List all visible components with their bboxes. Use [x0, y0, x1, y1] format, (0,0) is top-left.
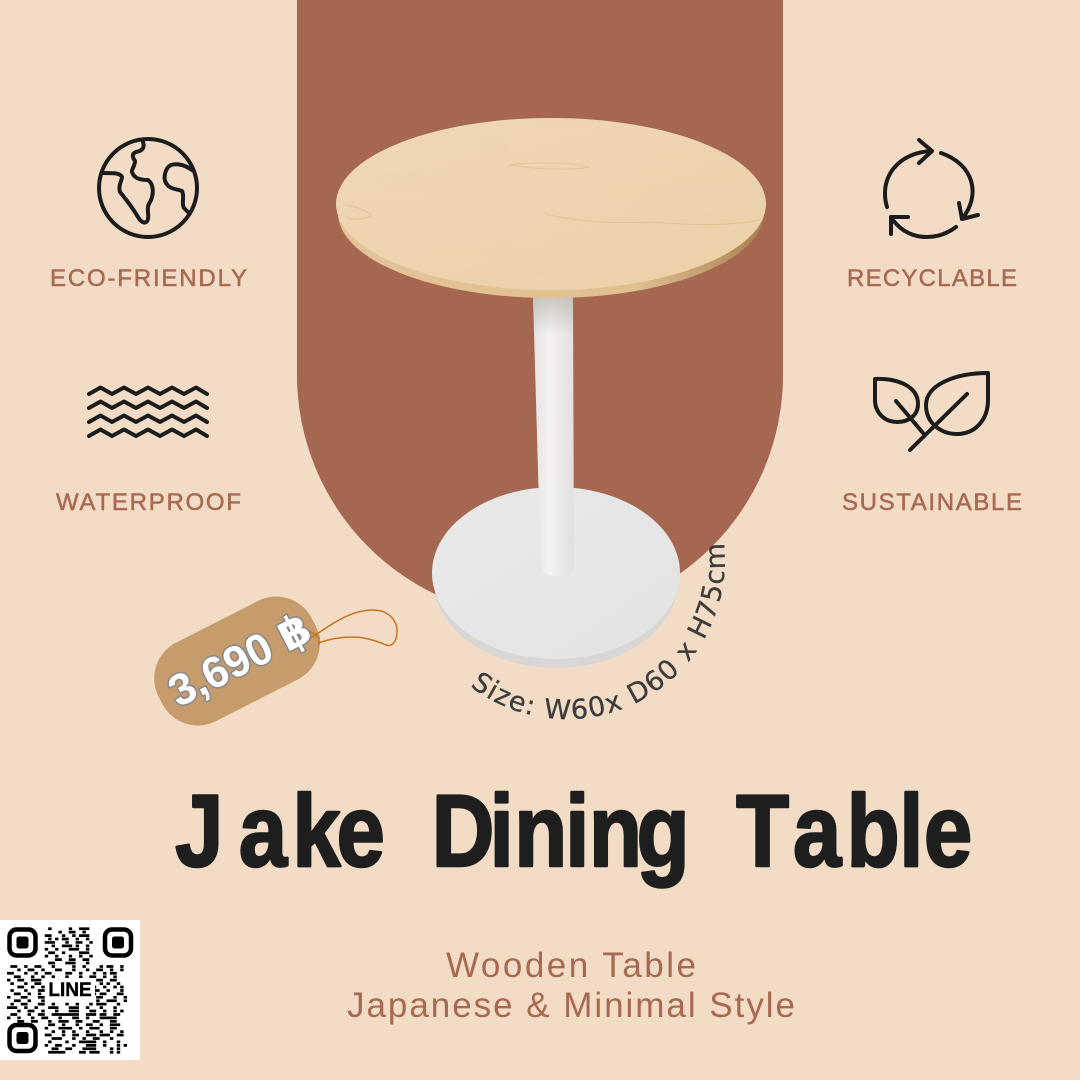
- subtitle: Japanese & Minimal Style: [347, 986, 795, 1025]
- curved size text: Size: W60x D60 x H75cm: [472, 545, 726, 720]
- title: [175, 774, 972, 889]
- subtitle: Wooden Table: [446, 946, 696, 985]
- title: Jake: [175, 774, 385, 889]
- title: Table: [736, 774, 972, 889]
- arch panel: [297, 0, 783, 618]
- label: sustainable: SUSTAINABLE: [842, 489, 1022, 516]
- icon: waves: [89, 388, 207, 436]
- table top: [336, 118, 766, 298]
- icon: globe: [99, 139, 197, 237]
- QR code: [0, 920, 140, 1060]
- QR finder patterns: [10, 930, 131, 1051]
- QR LINE logo: LINE: [48, 980, 92, 1001]
- icon: leaves: [875, 373, 988, 450]
- product: table: [336, 118, 766, 668]
- QR data modules: [7, 929, 127, 1052]
- label: eco-friendly: ECO-FRIENDLY: [50, 265, 247, 292]
- label: recyclable: RECYCLABLE: [847, 265, 1017, 292]
- title: Dining: [432, 774, 690, 889]
- table base: [432, 487, 680, 668]
- label: waterproof: WATERPROOF: [56, 489, 241, 516]
- tag string: [308, 610, 397, 645]
- tag body: [140, 583, 334, 739]
- table leg: [533, 296, 574, 576]
- price tag: [140, 583, 397, 739]
- subtitle: [347, 946, 795, 1025]
- price text: 3,690 ฿: [161, 604, 319, 717]
- icon: recycle arrows: [885, 140, 978, 237]
